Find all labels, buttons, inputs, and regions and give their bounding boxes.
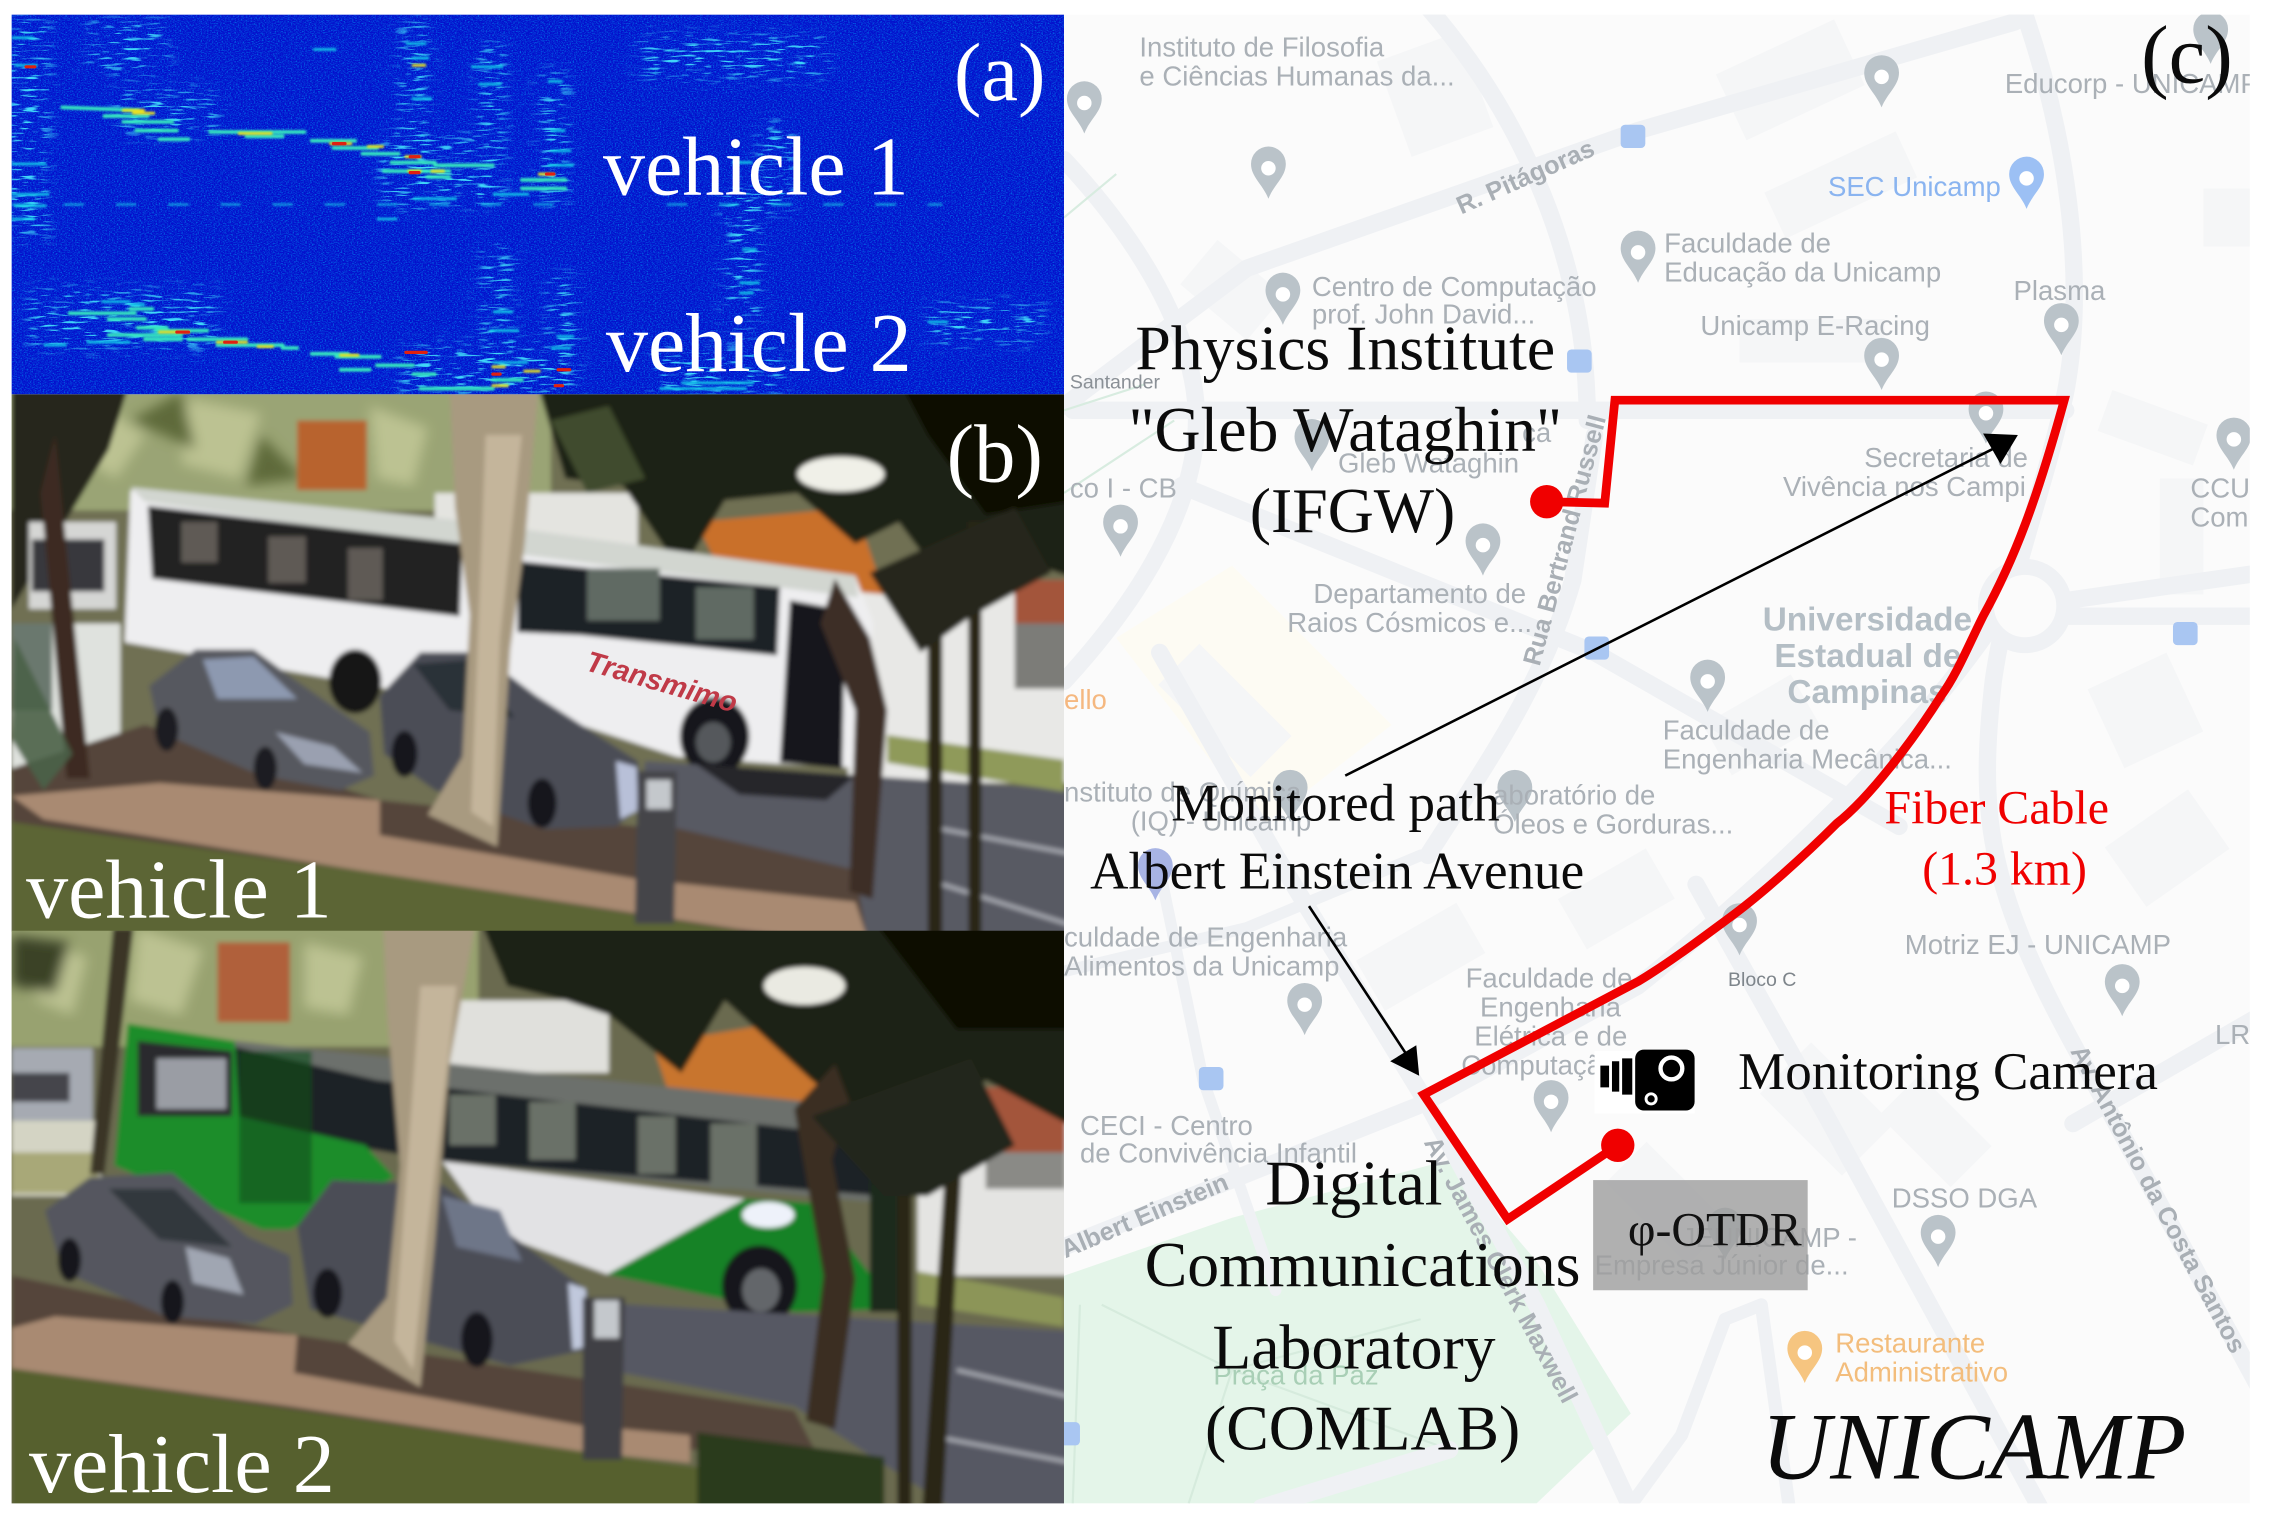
map place labels: co I - CB (1070, 472, 1177, 503)
map place labels: Educação da Unicamp (1664, 256, 1941, 287)
text: Digital Communications Laboratory: Communications (1145, 1229, 1580, 1300)
map place labels: Restaurante (1835, 1328, 1985, 1359)
roads (1064, 7, 2261, 1515)
text: monitored path (1090, 775, 1584, 901)
map place labels: Empresa Júnior de... (1595, 1249, 1849, 1280)
label: vehicle 2 on spectrogram: vehicle 2 (606, 297, 912, 390)
text: fiber cable length: (1.3 km) (1922, 842, 2087, 895)
map place labels: Faculdade de (1664, 227, 1831, 258)
label: vehicle 2 on photo: vehicle 2 (29, 1418, 335, 1511)
text on bus: Transmimo: Transmimo (582, 646, 741, 719)
map place labels: (IQ) - Unicamp (1131, 806, 1311, 837)
text: Digital Communications Laboratory: Digital (1265, 1148, 1442, 1219)
traces of vehicle 1 and vehicle 2 (62, 107, 565, 389)
map place labels: Engenharia (1480, 991, 1622, 1022)
panel: (c) campus map (1057, 7, 2268, 1515)
map place labels: Vivência nos Campi (1783, 471, 2026, 502)
text: UNICAMP: UNICAMP (1761, 1394, 2186, 1500)
panel: (b) photo of vehicle 2 (0, 916, 1080, 1518)
map place labels: Alimentos da Unicamp (1064, 951, 1339, 982)
fiber cable route (1424, 400, 2064, 1219)
speckle streaks (12, 38, 948, 389)
map place labels: Praça da Paz (1213, 1359, 1379, 1390)
buildings (1158, 19, 2261, 1265)
panel: (a) spectrogram (6, 15, 1064, 394)
map place labels: Computação (1461, 1049, 1617, 1080)
map place labels: Unicamp E-Racing (1700, 310, 1930, 341)
park (1064, 1160, 1631, 1503)
text: Digital Communications Laboratory: Laboratory (1212, 1312, 1496, 1383)
map place labels: Plasma (2014, 275, 2106, 306)
map place labels: CECI - Centro (1080, 1110, 1253, 1141)
map place labels: Faculdade de (1663, 714, 1830, 745)
label: (c): (c) (2141, 9, 2233, 101)
fiber start point (1530, 485, 1563, 518)
map place labels: Elétrica e de (1474, 1020, 1627, 1051)
bus stop icons (1060, 125, 2198, 1445)
map place labels: e Ciências Humanas da... (1139, 61, 1455, 92)
map place labels: DSSO DGA (1892, 1183, 2038, 1214)
arrow to monitored path lower end (1309, 906, 1419, 1076)
arrow to monitored path upper end (1345, 434, 2018, 776)
map place labels (1057, 32, 2268, 1408)
map place labels: Departamento de (1313, 578, 1526, 609)
map place labels: Secretaria de (1864, 442, 2028, 473)
map place labels: Óleos e Gorduras... (1493, 809, 1733, 840)
vertical event bands of speckle (6, 20, 1044, 394)
map place labels: Instituto de Filosofia (1139, 32, 1385, 63)
map place labels: Av. Antônio da Costa Santos (2065, 1041, 2251, 1358)
map place labels: aboratório de (1493, 780, 1655, 811)
text: fiber cable length (1885, 781, 2109, 895)
map place labels: nstituto de Química (1064, 777, 1302, 808)
label: vehicle 1 on spectrogram: vehicle 1 (603, 120, 909, 213)
panel: (b) photo of vehicle 1 (0, 380, 1080, 957)
label: (a): (a) (954, 26, 1046, 118)
text: Digital Communications Laboratory: (COMLAB) (1205, 1393, 1520, 1464)
map place labels: Engenharia Mecânica... (1663, 743, 1952, 774)
text: monitored path: Monitored path (1171, 775, 1500, 833)
map place labels: Rua Bertrand Russell (1518, 412, 1612, 668)
map pins (1067, 12, 2251, 1383)
map place labels: Universidade (1763, 602, 1972, 639)
map place labels: culdade de Engenharia (1064, 922, 1348, 953)
map place labels: Gleb Wataghin (1338, 448, 1519, 479)
text: fiber cable length: Fiber Cable (1885, 781, 2109, 834)
map place labels: ello (1064, 684, 1107, 715)
fiber end point (1601, 1129, 1634, 1162)
yellow building tint (1116, 565, 1392, 826)
map place labels: prof. John David... (1312, 298, 1535, 329)
map place labels: Albert Einstein (1057, 1168, 1233, 1264)
map place labels: Estadual de (1774, 638, 1961, 675)
map place labels: Campinas (1787, 674, 1947, 711)
map place labels: CCUE (2190, 472, 2268, 503)
map place labels: Administrativo (1835, 1357, 2008, 1388)
map place labels: Faculdade de (1466, 962, 1632, 993)
label: vehicle 1 on photo: vehicle 1 (26, 844, 332, 937)
box: φ-OTDR: φ-OTDR (1628, 1203, 1802, 1256)
map place labels: Centro de Computação (1312, 271, 1597, 302)
map place labels: LR (2215, 1019, 2250, 1050)
heading: Physics Institute: "Gleb Wataghin" (1128, 394, 1562, 465)
map place labels: ca (1522, 417, 1552, 448)
map place labels: SEC Unicamp (1828, 171, 2001, 202)
heading: Physics Institute: (IFGW) (1250, 475, 1455, 546)
map place labels: JEUNICAMP - (1682, 1222, 1857, 1253)
box: φ-OTDR (1593, 1180, 1808, 1290)
heading: Physics Institute (1128, 313, 1562, 546)
map place labels: R. Pitágoras (1452, 134, 1599, 220)
heading: Physics Institute: Physics Institute (1135, 313, 1555, 384)
map place labels: Com (2190, 501, 2249, 532)
map place labels: Av. James Clerk Maxwell (1418, 1132, 1583, 1408)
map place labels: de Convivência Infantil (1080, 1138, 1357, 1169)
text: Digital Communications Laboratory (1145, 1148, 1580, 1464)
map place labels: Bloco C (1728, 969, 1796, 991)
map place labels: Motriz EJ - UNICAMP (1905, 929, 2171, 960)
map place labels: Raios Cósmicos e... (1287, 607, 1532, 638)
icon: monitoring camera (1595, 1050, 1695, 1113)
text: monitored path: Albert Einstein Avenue (1090, 843, 1584, 901)
map place labels: Educorp - UNICAMP (2005, 68, 2259, 99)
label: monitoring camera: Monitoring Camera (1738, 1043, 2158, 1101)
map place labels: Santander (1070, 372, 1161, 394)
label: (b): (b) (947, 407, 1043, 499)
